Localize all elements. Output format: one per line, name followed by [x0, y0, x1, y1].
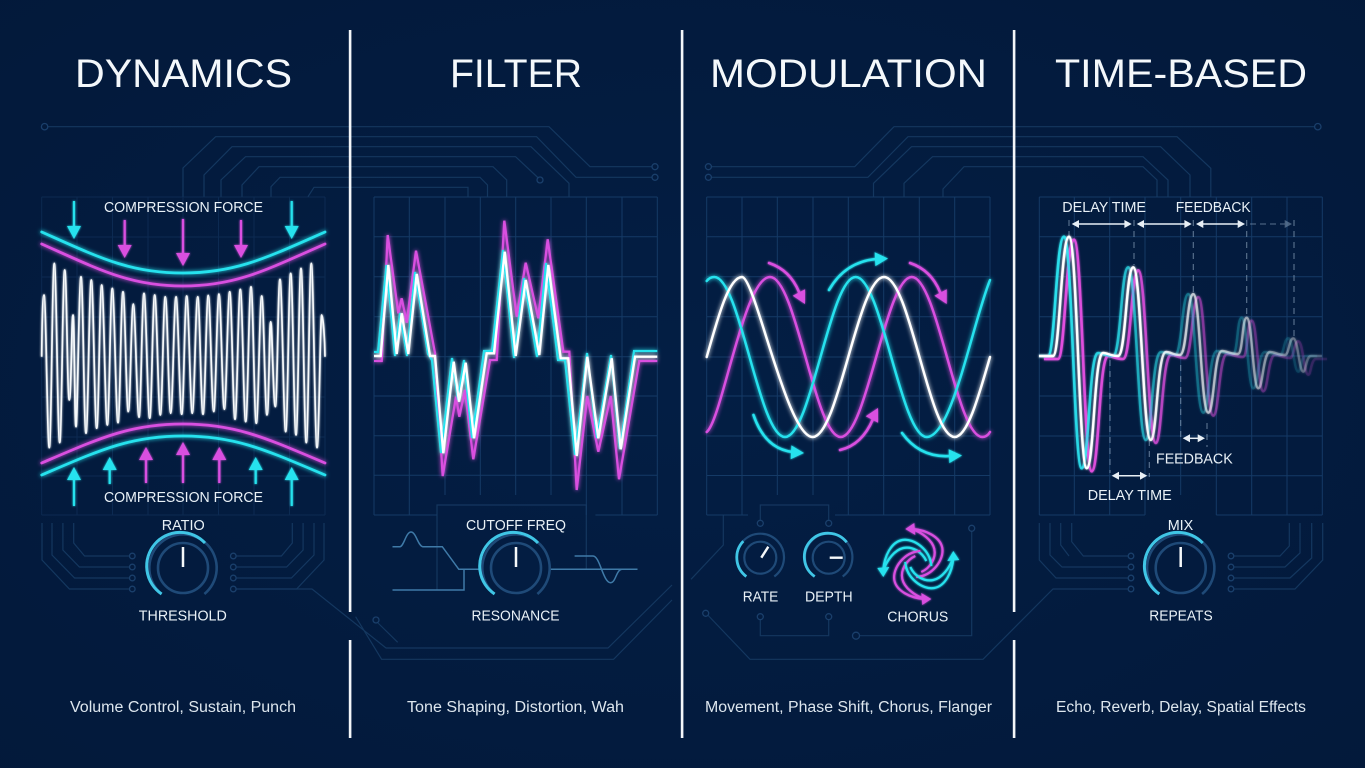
panel: dynamics — [42, 52, 325, 716]
caption: time-based: Echo, Reverb, Delay, Spatial Effects — [1056, 699, 1306, 716]
caption: modulation: Movement, Phase Shift, Chorus, Flanger — [705, 699, 992, 716]
time-based grid — [1039, 197, 1322, 515]
heading: dynamics: DYNAMICS — [75, 52, 292, 96]
filter grid — [374, 197, 657, 515]
label: feedback top: FEEDBACK — [1176, 199, 1251, 216]
knob: ratio — [147, 532, 217, 594]
caption: dynamics: Volume Control, Sustain, Punch — [70, 699, 296, 716]
compression waveform — [42, 263, 325, 448]
label: ratio: RATIO — [162, 517, 205, 534]
label: repeats: REPEATS — [1149, 608, 1213, 625]
modulation motion arrows — [754, 252, 962, 463]
panel: filter — [374, 52, 657, 716]
label: depth: DEPTH — [805, 589, 853, 606]
section dividers — [349, 30, 1015, 738]
label: threshold: THRESHOLD — [139, 608, 227, 625]
dynamics grid — [42, 197, 325, 515]
knob: rate — [737, 534, 784, 576]
compression curves — [42, 232, 325, 475]
delay dimension arrows — [1072, 220, 1245, 480]
label: rate: RATE — [743, 589, 778, 606]
knob: mix — [1144, 532, 1214, 594]
label: compression force bottom: COMPRESSION FORCE — [104, 489, 263, 506]
label: delay time lower: DELAY TIME — [1088, 487, 1172, 504]
knob: cutoff — [480, 532, 550, 594]
knob: depth — [804, 533, 852, 576]
label: feedback lower: FEEDBACK — [1156, 450, 1233, 467]
label: mix: MIX — [1168, 517, 1193, 534]
fading arrow — [1250, 220, 1292, 228]
label: chorus: CHORUS — [887, 609, 948, 626]
filter output curve — [550, 556, 638, 583]
filter waveforms — [374, 221, 657, 490]
modulation sine waves — [707, 277, 990, 437]
label: compression force top: COMPRESSION FORCE — [104, 199, 263, 216]
panel: time-based — [1039, 52, 1327, 716]
heading: modulation: MODULATION — [710, 52, 987, 96]
circuit traces — [41, 124, 1323, 659]
label: resonance: RESONANCE — [472, 608, 560, 625]
heading: time-based: TIME-BASED — [1055, 52, 1307, 96]
modulation grid — [707, 197, 990, 515]
compression arrows — [67, 201, 299, 506]
icon: chorus swirl — [877, 523, 959, 605]
caption: filter: Tone Shaping, Distortion, Wah — [407, 699, 624, 716]
delay echo waveforms — [1039, 237, 1327, 471]
label: delay time top: DELAY TIME — [1062, 199, 1146, 216]
filter input curve — [392, 532, 481, 590]
panel: modulation — [705, 52, 992, 716]
label: cutoff freq: CUTOFF FREQ — [466, 517, 566, 534]
heading: filter: FILTER — [450, 52, 582, 96]
delay dashed guides — [1069, 220, 1294, 477]
